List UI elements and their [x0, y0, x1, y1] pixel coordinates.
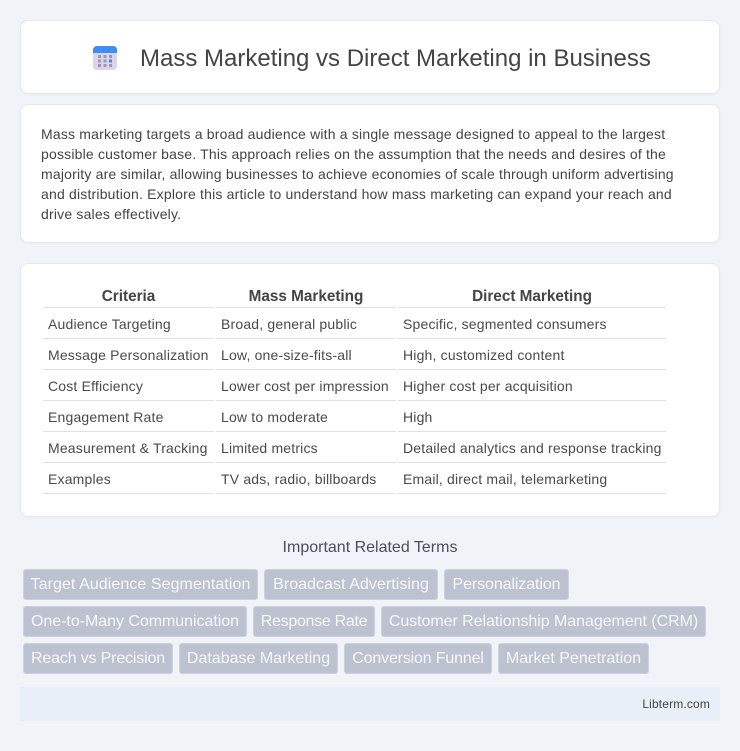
related terms tags: Market Penetration	[506, 650, 641, 667]
table rows: Limited metrics	[221, 440, 318, 456]
table rows: Detailed analytics and response tracking	[403, 440, 662, 456]
related terms tags: Conversion Funnel	[352, 650, 484, 667]
related terms tags: Customer Relationship Management (CRM)	[389, 613, 698, 630]
table header: mass marketing: Mass Marketing	[249, 288, 363, 305]
table rows: High	[403, 409, 433, 425]
footer bar	[20, 687, 720, 721]
table rows: Specific, segmented consumers	[403, 316, 607, 332]
icon: calendar	[93, 46, 117, 70]
table header: direct marketing: Direct Marketing	[472, 288, 592, 305]
intro text: and distribution. Explore this article to understand how mass marketing can expand your reach and	[41, 186, 672, 202]
table rows: Lower cost per impression	[221, 378, 389, 394]
table rows: Engagement Rate	[48, 409, 164, 425]
table rows: TV ads, radio, billboards	[221, 471, 376, 487]
table rows: Message Personalization	[48, 347, 209, 363]
table rows: Broad, general public	[221, 316, 357, 332]
intro text: Mass marketing targets a broad audience with a single message designed to appeal to the largest	[41, 126, 665, 142]
intro text: drive sales effectively.	[41, 206, 181, 222]
related terms tags: Database Marketing	[187, 650, 330, 667]
table header: criteria: Criteria	[102, 288, 155, 305]
related terms tags: Broadcast Advertising	[273, 576, 429, 593]
related terms tags: Target Audience Segmentation	[31, 576, 250, 593]
table rows: Email, direct mail, telemarketing	[403, 471, 607, 487]
related terms tags	[23, 569, 706, 674]
table rows: Low, one-size-fits-all	[221, 347, 352, 363]
table rows: Cost Efficiency	[48, 378, 143, 394]
related terms tags: Personalization	[453, 576, 560, 593]
title: Mass Marketing vs Direct Marketing in Business	[140, 45, 651, 72]
intro text: majority are similar, allowing businesses to achieve economies of scale through uniform advertising	[41, 166, 674, 182]
table rows: High, customized content	[403, 347, 565, 363]
table rows: Audience Targeting	[48, 316, 171, 332]
table rows: Measurement & Tracking	[48, 440, 208, 456]
intro text	[41, 126, 674, 222]
intro panel	[20, 104, 720, 243]
table rows: Low to moderate	[221, 409, 328, 425]
related terms heading: Important Related Terms	[283, 539, 457, 556]
intro text: possible customer base. This approach relies on the assumption that the needs and desires of the	[41, 146, 666, 162]
comparison table panel	[20, 263, 720, 517]
table rows	[43, 307, 666, 494]
header panel	[20, 20, 720, 94]
footer credit: Libterm.com	[642, 697, 710, 711]
related terms tags: One-to-Many Communication	[31, 613, 239, 630]
related terms tags: Response Rate	[261, 613, 367, 630]
related terms tags: Reach vs Precision	[31, 650, 165, 667]
table rows: Examples	[48, 471, 111, 487]
table rows: Higher cost per acquisition	[403, 378, 573, 394]
